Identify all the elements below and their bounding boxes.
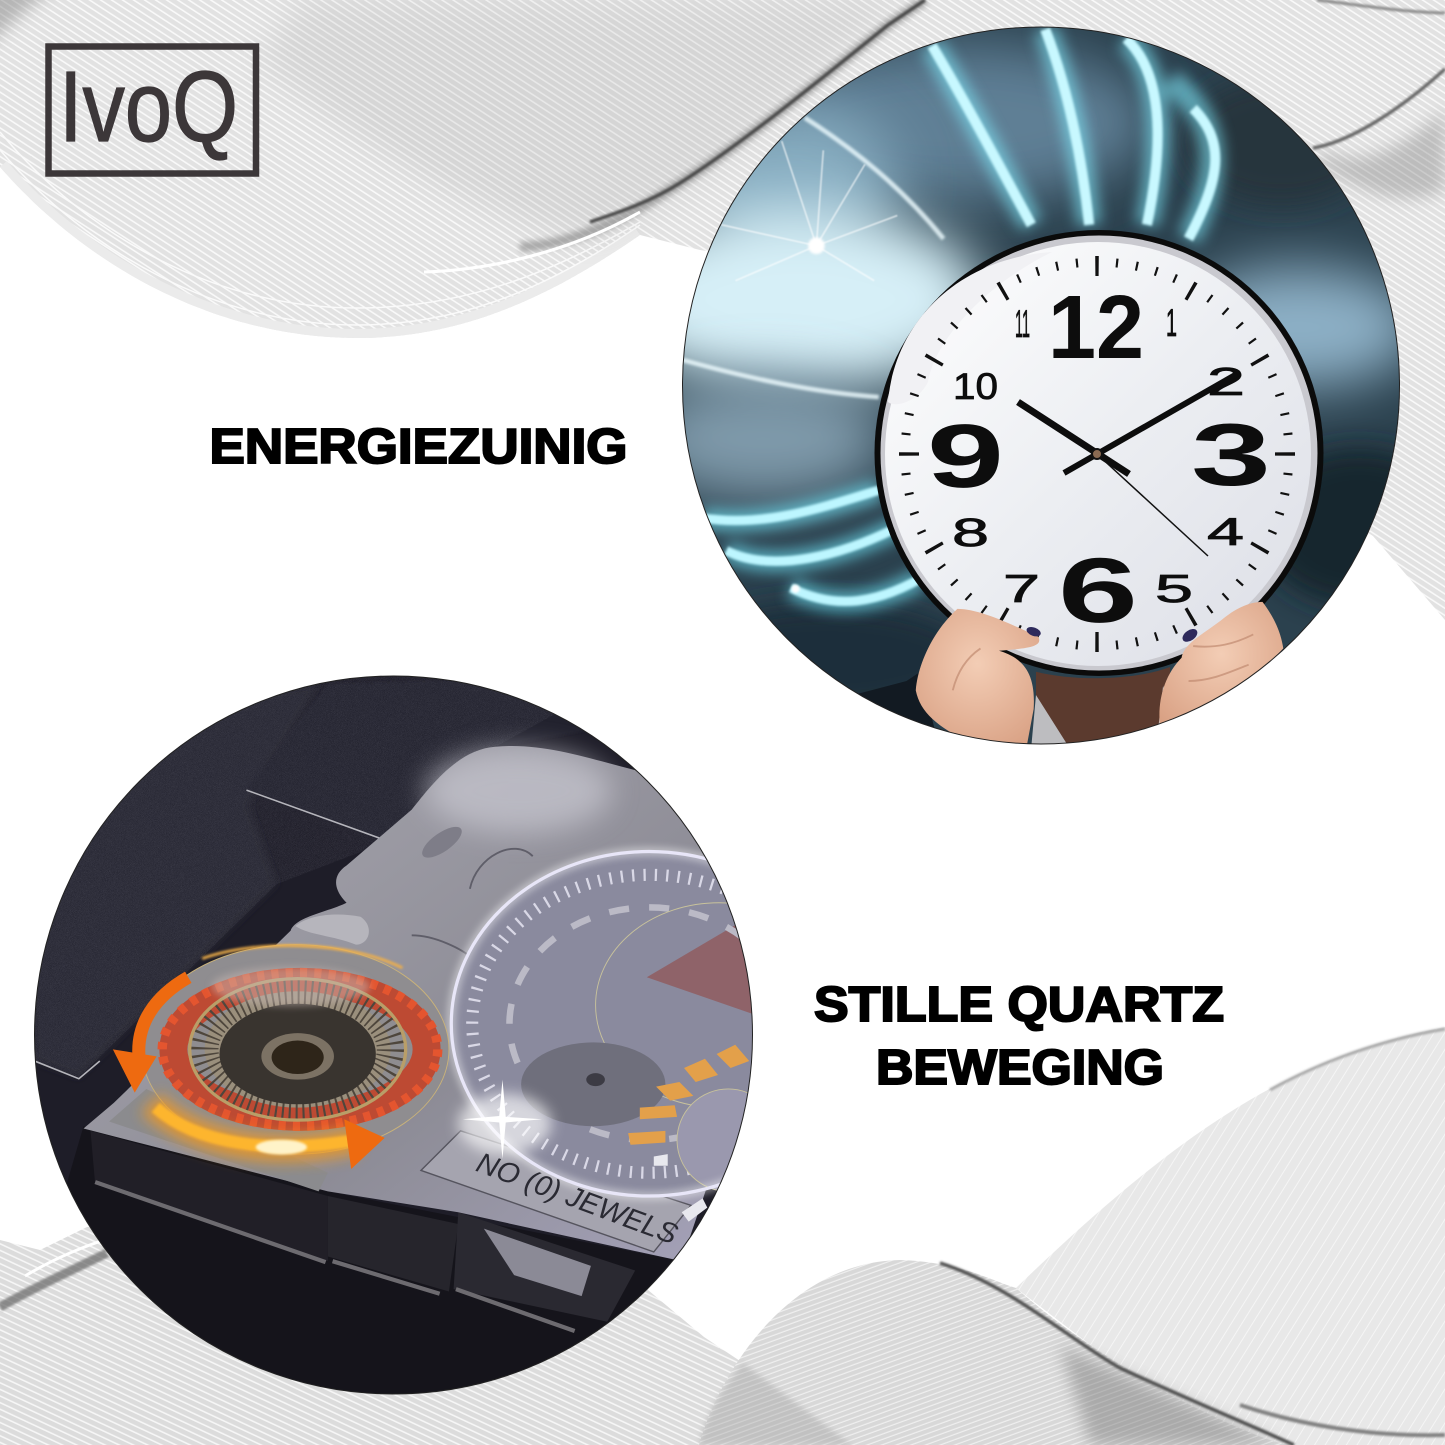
photo circle: silent quartz movement bbox=[35, 676, 752, 1394]
movement label: NO (0) JEWELS: NO (0) JEWELS bbox=[472, 1147, 682, 1251]
clock small numerals: 1 bbox=[1166, 302, 1177, 345]
clock small numerals: 11 bbox=[1015, 303, 1030, 346]
heading: STILLE QUARTZ BEWEGING: STILLE QUARTZ bbox=[814, 978, 1224, 1032]
wall clock bbox=[874, 230, 1324, 676]
movement large dial ring bbox=[444, 844, 752, 1222]
clock small numerals: 8 bbox=[952, 511, 989, 555]
clock small numerals: 5 bbox=[1155, 568, 1193, 611]
top glow arc bbox=[202, 946, 402, 968]
photo circle: clock held in front of light streaks bbox=[683, 28, 1399, 744]
clock minute hand bbox=[1064, 374, 1237, 473]
clock hour ticks bbox=[909, 266, 1285, 642]
left arrow bbox=[113, 977, 188, 1093]
movement rotor gear with orange arrows bbox=[113, 945, 449, 1169]
photo circle outline bbox=[34, 676, 752, 1394]
bottom arrow with glow bbox=[151, 1103, 385, 1169]
movement grey plastic body bbox=[84, 746, 756, 1261]
background wave: bottom right sheet bbox=[1016, 1027, 1445, 1445]
clock hour hand bbox=[1018, 402, 1129, 474]
movement backdrop: dark fabric bbox=[35, 676, 716, 1260]
photo circle outline bbox=[682, 27, 1400, 744]
clock numerals: 12 bbox=[1048, 278, 1144, 378]
clock small numerals: 4 bbox=[1207, 511, 1244, 554]
clock numerals: 6 bbox=[1058, 540, 1138, 642]
clock frame bbox=[874, 230, 1324, 676]
background wave: bottom centre hill bbox=[699, 1260, 1445, 1445]
heading: STILLE QUARTZ BEWEGING: BEWEGING bbox=[876, 1041, 1164, 1095]
clock small numerals bbox=[952, 302, 1245, 611]
movement sparkle bbox=[458, 1080, 551, 1159]
clock numerals: 9 bbox=[927, 407, 1004, 507]
clock face bbox=[885, 242, 1311, 666]
background wave: top band bbox=[0, 0, 1445, 620]
logo: IvoQ: IvoQ bbox=[59, 51, 238, 163]
clock small numerals: 10 bbox=[953, 366, 998, 407]
movement lower black housing bbox=[67, 1126, 682, 1396]
clock centre pin bbox=[1092, 449, 1102, 459]
heading: ENERGIEZUINIG: ENERGIEZUINIG bbox=[210, 420, 628, 474]
clock small numerals: 2 bbox=[1207, 361, 1245, 404]
photo backdrop bbox=[683, 28, 1399, 744]
hands and neck holding the clock bbox=[916, 602, 1283, 746]
clock numerals bbox=[932, 295, 1266, 623]
clock small numerals: 7 bbox=[1003, 568, 1040, 611]
clock minute ticks bbox=[905, 262, 1289, 646]
heading: STILLE QUARTZ BEWEGING bbox=[814, 978, 1224, 1095]
background wave: bottom left band bbox=[0, 1200, 852, 1445]
clock second hand bbox=[1104, 462, 1208, 556]
movement orange markers bbox=[628, 1045, 749, 1145]
clock numerals: 3 bbox=[1191, 405, 1271, 504]
